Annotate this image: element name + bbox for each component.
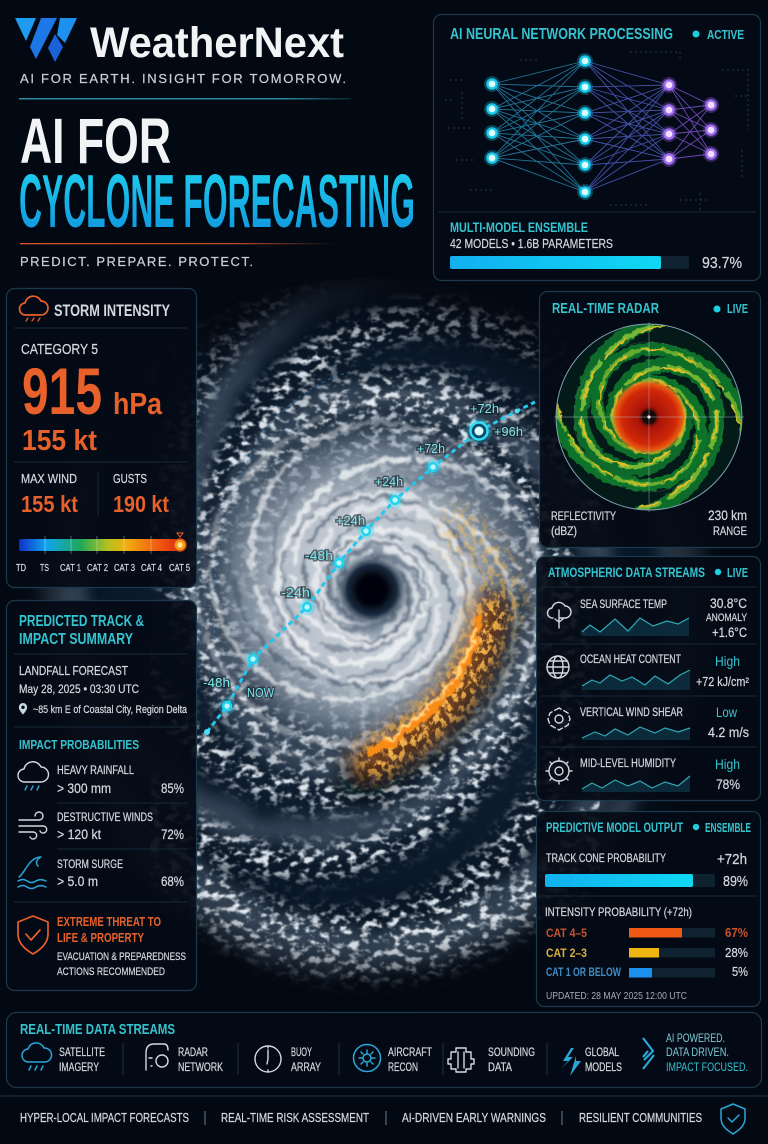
predicted storm track: +72h	[417, 441, 445, 456]
panel: predicted track and impact summary: ~85 km E of Coastal City, Region Delta	[33, 704, 188, 716]
panel: storm intensity	[6, 288, 196, 588]
icon: global models	[561, 1048, 581, 1076]
panel: real-time data streams: ARRAY	[291, 1062, 321, 1074]
panel: real-time data streams: IMPACT FOCUSED.	[666, 1062, 748, 1074]
panel: storm intensity: 915	[22, 354, 102, 428]
title: AI FOR	[20, 105, 171, 177]
panel: real-time data streams: SOUNDING	[488, 1047, 535, 1059]
panel: storm intensity: GUSTS	[113, 471, 147, 486]
footer strip: HYPER-LOCAL IMPACT FORECASTS	[20, 1111, 189, 1125]
title	[19, 105, 415, 269]
panel: predictive model output	[536, 812, 760, 1006]
panel: predicted track and impact summary: STORM SURGE	[57, 859, 123, 871]
panel: predicted track and impact summary: HEAVY RAINFALL	[57, 765, 134, 777]
bar: cat 2-3	[629, 948, 715, 958]
panel: real-time data streams: REAL-TIME DATA STREAMS	[20, 1022, 175, 1038]
satellite view of cyclone	[34, 283, 710, 990]
panel: real-time data streams: BUOY	[291, 1047, 312, 1059]
panel: atmospheric data streams: OCEAN HEAT CONTENT	[580, 654, 681, 666]
panel: atmospheric data streams: ATMOSPHERIC DATA STREAMS	[548, 564, 705, 580]
panel: real-time data streams: RADAR	[178, 1047, 208, 1059]
panel: predicted track and impact summary: EVACUATION & PREPAREDNESS	[57, 951, 186, 963]
bar: cat 4-5	[629, 928, 715, 938]
chart: category scale: CAT 3	[114, 563, 135, 574]
panel: predictive model output: 28%	[725, 945, 748, 960]
panel: predicted track and impact summary: > 5.0 m	[57, 874, 98, 889]
panel: predicted track and impact summary: > 120 kt	[57, 827, 101, 842]
panel: predicted track and impact summary: ACTIONS RECOMMENDED	[57, 966, 165, 978]
panel: predicted track and impact summary: 68%	[161, 874, 184, 889]
panel: storm intensity: 155 kt	[21, 491, 78, 517]
panel: real-time radar: REAL-TIME RADAR	[552, 300, 659, 317]
panel: real-time radar: REFLECTIVITY	[551, 511, 616, 523]
sparkline: humidity	[582, 776, 690, 792]
panel: real-time radar: (dBZ)	[551, 526, 577, 538]
panel: AI neural network processing: MULTI-MODEL ENSEMBLE	[450, 220, 588, 235]
panel: real-time radar	[538, 290, 762, 548]
panel: real-time data streams: DATA DRIVEN.	[666, 1047, 729, 1059]
panel: storm intensity: 190 kt	[113, 491, 169, 517]
icon: wave	[18, 857, 46, 888]
icon: wind shear	[548, 708, 570, 730]
icon: aircraft recon	[354, 1044, 380, 1072]
panel: AI neural network processing: 42 MODELS • 1.6B PARAMETERS	[450, 236, 613, 251]
panel: real-time data streams: NETWORK	[178, 1062, 223, 1074]
progress bar: ensemble	[450, 256, 689, 269]
panel: real-time data streams: DATA	[488, 1062, 512, 1074]
predicted storm track: +72h	[470, 401, 499, 416]
brand header: WeatherNext	[90, 19, 344, 67]
panel: predicted track and impact summary: 85%	[161, 781, 184, 796]
predicted storm track: -24h	[281, 585, 310, 600]
panel: predictive model output: CAT 1 OR BELOW	[546, 965, 621, 979]
icon: sea surface temp	[547, 602, 571, 628]
predicted storm track: +24h	[375, 474, 403, 489]
panel: atmospheric data streams: SEA SURFACE TEMP	[580, 599, 667, 611]
panel: predicted track and impact summary: PREDICTED TRACK &	[19, 613, 144, 630]
chart: category scale: TD	[16, 563, 26, 574]
panel: storm intensity: hPa	[113, 386, 163, 421]
panel: predictive model output: INTENSITY PROBABILITY (+72h)	[545, 905, 692, 919]
panel: predicted track and impact summary: LANDFALL FORECAST	[19, 663, 128, 678]
panel: predictive model output: TRACK CONE PROBABILITY	[546, 851, 666, 865]
chart: neural network diagram	[445, 52, 749, 210]
bar: cat 1 or below	[629, 968, 715, 978]
brand header: AI FOR EARTH. INSIGHT FOR TOMORROW.	[20, 71, 346, 86]
chart: category scale: CAT 4	[141, 563, 162, 574]
panel: atmospheric data streams: LIVE	[727, 565, 748, 580]
footer strip: AI-DRIVEN EARLY WARNINGS	[402, 1111, 546, 1125]
panel: real-time data streams	[6, 1012, 762, 1088]
panel: storm intensity: 155 kt	[22, 425, 97, 457]
footer strip: REAL-TIME RISK ASSESSMENT	[221, 1111, 369, 1125]
panel: predicted track and impact summary: 72%	[161, 827, 184, 842]
predicted storm track: -48h	[203, 675, 230, 690]
panel: atmospheric data streams: VERTICAL WIND SHEAR	[580, 707, 683, 719]
panel: storm intensity: STORM INTENSITY	[54, 301, 170, 320]
panel: predictive model output: UPDATED: 28 MAY 2025 12:00 UTC	[546, 990, 687, 1002]
panel: atmospheric data streams: ANOMALY	[706, 612, 748, 624]
panel: real-time data streams: AIRCRAFT	[388, 1047, 432, 1059]
icon: radar network	[146, 1044, 168, 1070]
panel: AI neural network processing: AI NEURAL NETWORK PROCESSING	[450, 26, 673, 43]
icon: warning shield	[18, 916, 48, 954]
panel: atmospheric data streams: +72 kJ/cm²	[696, 674, 750, 689]
panel: predicted track and impact summary	[6, 600, 196, 990]
panel: atmospheric data streams: High	[715, 756, 740, 772]
panel: real-time data streams: GLOBAL	[585, 1047, 619, 1059]
panel: real-time data streams: SATELLITE	[59, 1047, 105, 1059]
predicted storm track: +96h	[494, 424, 523, 439]
chart: category scale	[16, 533, 190, 574]
panel: AI neural network processing: ACTIVE	[707, 27, 744, 42]
icon: globe	[547, 656, 569, 678]
icon: buoy array	[255, 1046, 281, 1072]
predicted storm track: NOW	[247, 685, 275, 700]
progress bar: track cone	[545, 874, 715, 887]
title: PREDICT. PREPARE. PROTECT.	[20, 254, 253, 269]
panel: predicted track and impact summary: LIFE & PROPERTY	[57, 930, 144, 945]
panel: atmospheric data streams: MID-LEVEL HUMIDITY	[580, 758, 676, 770]
panel: real-time radar: LIVE	[727, 301, 748, 316]
panel: predictive model output: 89%	[723, 874, 748, 890]
predicted storm track: +24h	[336, 513, 365, 528]
panel: real-time data streams: AI POWERED.	[666, 1033, 725, 1045]
sparkline: ocean heat	[582, 670, 690, 690]
panel: predicted track and impact summary: May 28, 2025 • 03:30 UTC	[19, 682, 139, 696]
icon: chevrons	[643, 1038, 654, 1069]
chart: category scale: CAT 5	[169, 563, 190, 574]
panel: predicted track and impact summary: DESTRUCTIVE WINDS	[57, 812, 153, 824]
predicted storm track	[203, 401, 535, 735]
panel: predictive model output: PREDICTIVE MODEL OUTPUT	[546, 820, 684, 835]
icon: rain cloud	[18, 762, 49, 790]
panel: real-time data streams: RECON	[388, 1062, 418, 1074]
chart: category scale: CAT 2	[87, 563, 108, 574]
panel: predicted track and impact summary: EXTREME THREAT TO	[57, 914, 161, 929]
predicted storm track: -48h	[305, 548, 333, 563]
panel: predictive model output: 5%	[732, 964, 748, 979]
icon: satellite imagery	[22, 1043, 52, 1070]
panel: predictive model output: CAT 2–3	[546, 946, 587, 960]
sparkline: wind shear	[582, 727, 690, 740]
panel: atmospheric data streams: 4.2 m/s	[708, 725, 749, 740]
icon: shield check	[721, 1104, 745, 1134]
panel: storm intensity: CATEGORY 5	[21, 341, 98, 358]
icon: wind	[19, 812, 47, 839]
panel: predictive model output: +72h	[717, 852, 747, 868]
panel: atmospheric data streams: 30.8°C	[710, 596, 747, 611]
panel: predicted track and impact summary: > 300 mm	[57, 781, 111, 796]
chart: category scale: CAT 1	[60, 563, 81, 574]
panel: AI neural network processing: 93.7%	[702, 255, 742, 272]
panel: AI neural network processing	[434, 14, 760, 280]
panel: predicted track and impact summary: IMPACT SUMMARY	[19, 631, 133, 648]
panel: real-time data streams: MODELS	[585, 1062, 622, 1074]
chart: category scale: TS	[40, 563, 49, 574]
footer strip: RESILIENT COMMUNITIES	[579, 1111, 702, 1125]
panel: real-time data streams: IMAGERY	[59, 1062, 99, 1074]
panel: atmospheric data streams: Low	[716, 704, 738, 720]
brand header	[15, 18, 351, 100]
sparkline: sea surface temp	[582, 618, 689, 636]
panel: atmospheric data streams: +1.6°C	[712, 625, 747, 640]
icon: WeatherNext logo	[15, 18, 77, 62]
icon: sounding data	[448, 1048, 474, 1072]
icon: humidity gauge	[546, 758, 572, 784]
panel: real-time radar: 230 km	[708, 508, 747, 523]
panel: atmospheric data streams: High	[715, 653, 740, 669]
icon: location pin	[19, 703, 27, 714]
panel: predicted track and impact summary: IMPACT PROBABILITIES	[19, 737, 139, 752]
footer strip	[0, 1096, 768, 1134]
panel: real-time radar: RANGE	[713, 526, 747, 538]
panel: atmospheric data streams: 78%	[716, 777, 740, 792]
panel: storm intensity: MAX WIND	[21, 471, 77, 486]
panel: predictive model output: 67%	[725, 925, 748, 940]
chart: radar sweep	[554, 322, 744, 512]
panel: atmospheric data streams	[536, 556, 760, 800]
panel: predictive model output: CAT 4–5	[546, 926, 587, 940]
icon: storm cloud	[19, 296, 48, 321]
